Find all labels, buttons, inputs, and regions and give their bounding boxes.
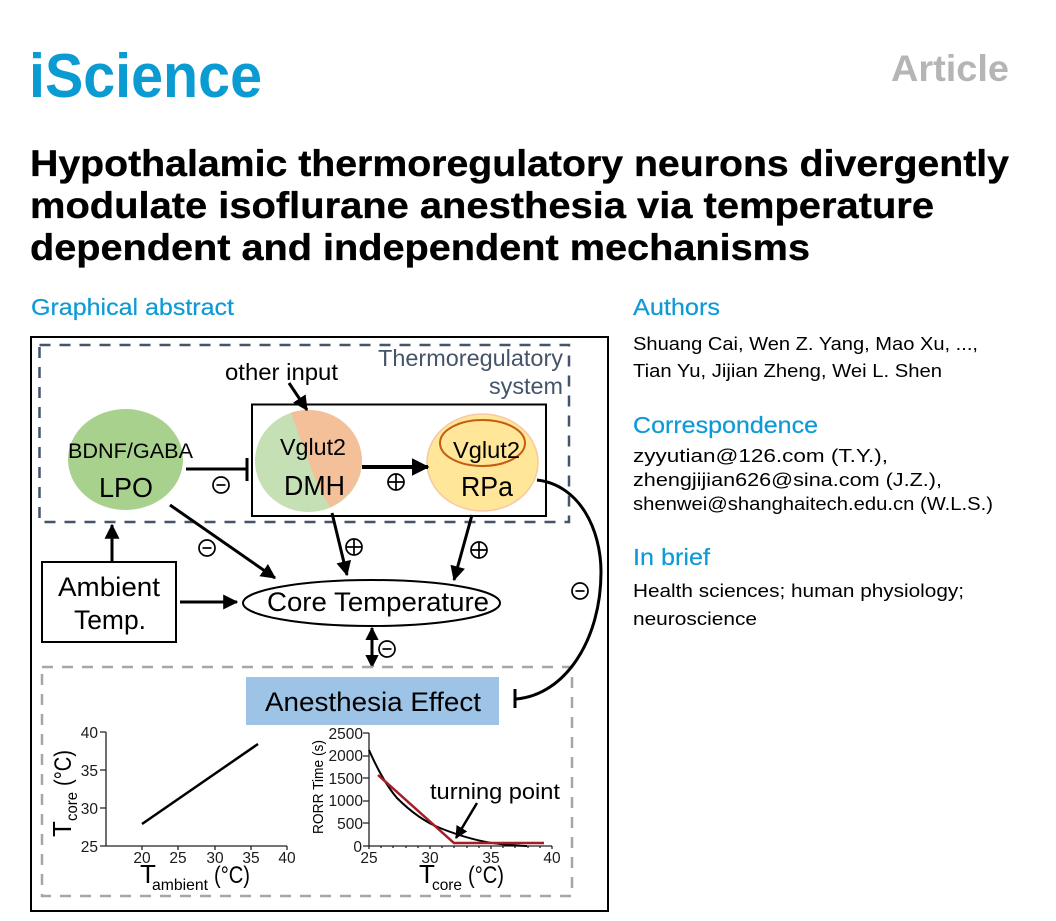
title: dependent and independent mechanisms <box>30 226 810 268</box>
chart: Tcore vs Tambient: ambient <box>152 877 209 894</box>
chart: Tcore vs Tambient: (°C) <box>214 862 250 889</box>
box: Ambient Temp.: Temp. <box>74 605 146 635</box>
box: Anesthesia Effect: Anesthesia Effect <box>265 687 482 717</box>
chart: RORR time vs Tcore: 2500 <box>329 726 363 743</box>
panel: anesthesia dashed box <box>42 667 572 896</box>
text: author list: Shuang Cai, Wen Z. Yang, Mao Xu, ..., <box>633 333 978 354</box>
sign: minus core-anesthesia <box>379 641 395 657</box>
text: correspondence emails: zhengjijian626@sina.com (J.Z.), <box>633 469 942 490</box>
title: modulate isoflurane anesthesia via temperature <box>30 184 934 226</box>
arrow: DMH to core temperature <box>332 513 347 575</box>
chart: Tcore vs Tambient: 25 <box>81 839 98 856</box>
chart: Tcore vs Tambient: 40 <box>278 850 296 867</box>
chart: Tcore vs Tambient: 35 <box>242 850 260 867</box>
text: in brief keywords: Health sciences; human physiology; <box>633 580 964 601</box>
arrow: core temperature to anesthesia, two-way <box>370 628 374 667</box>
inhibition arrow: RPa to anesthesia effect <box>515 480 601 708</box>
arrow: ambient to core temperature <box>180 600 237 604</box>
text: correspondence emails: shenwei@shanghaitech.edu.cn (W.L.S.) <box>633 493 993 514</box>
arrow: DMH to RPa <box>362 465 428 469</box>
text: author list: Tian Yu, Jijian Zheng, Wei L. Shen <box>633 360 942 381</box>
heading: Graphical abstract: Graphical abstract <box>31 294 234 320</box>
label: other input: other input <box>225 359 338 385</box>
sign: plus DMH-RPa <box>388 474 404 490</box>
box: Anesthesia Effect <box>246 677 499 725</box>
node: DMH <box>255 410 362 512</box>
text: correspondence emails: zyyutian@126.com (T.Y.), <box>633 445 888 466</box>
heading: In brief: In brief <box>633 544 711 570</box>
node: RPa: Vglut2 <box>453 437 520 463</box>
node: LPO: LPO <box>99 472 153 503</box>
chart: RORR time vs Tcore <box>311 726 561 894</box>
chart: RORR time vs Tcore: T <box>419 859 435 889</box>
chart: RORR time vs Tcore: turning point <box>430 779 561 804</box>
heading: Correspondence: Correspondence <box>633 412 818 438</box>
arrow: other input to DMH <box>289 383 307 410</box>
chart: Tcore vs Tambient: 30 <box>81 801 98 818</box>
chart: Tcore vs Tambient: 20 <box>133 850 151 867</box>
box: DMH and RPa group <box>252 404 546 516</box>
chart: RORR time vs Tcore: 40 <box>543 850 561 867</box>
chart: RORR time vs Tcore: core <box>432 877 462 894</box>
heading: Authors: Authors <box>633 294 720 320</box>
label: Thermoregulatory system: system <box>489 373 563 399</box>
chart: RORR time vs Tcore: 35 <box>482 850 500 867</box>
sign: minus LPO-DMH <box>213 477 229 493</box>
chart: Tcore vs Tambient: 35 <box>81 763 98 780</box>
arrow: LPO to core temperature <box>170 505 275 578</box>
title <box>30 142 1009 268</box>
arrow: RPa to core temperature <box>454 515 472 580</box>
panel: graphical abstract <box>31 337 608 911</box>
arrow: ambient to LPO <box>110 525 114 562</box>
chart: Tcore vs Tambient: T <box>140 859 156 889</box>
chart: RORR time vs Tcore: 500 <box>337 816 363 833</box>
node: RPa: RPa <box>461 471 514 502</box>
text: author list <box>633 333 978 381</box>
node: DMH: DMH <box>284 470 345 501</box>
label: Thermoregulatory system <box>378 345 563 399</box>
chart: Tcore vs Tambient: 30 <box>206 850 224 867</box>
node: LPO <box>68 409 194 510</box>
logo: iScience: iScience <box>29 42 262 111</box>
sign: minus RPa-anesthesia <box>572 583 588 599</box>
box: Ambient Temp.: Ambient <box>58 572 160 602</box>
node: Core Temperature: Core Temperature <box>267 587 489 617</box>
label: Thermoregulatory system: Thermoregulatory <box>378 345 563 371</box>
inhibition arrow: LPO to DMH <box>186 458 247 481</box>
chart: Tcore vs Tambient <box>47 725 296 894</box>
chart: Tcore vs Tambient: 25 <box>169 850 187 867</box>
chart: RORR time vs Tcore: 25 <box>360 850 378 867</box>
chart: RORR time vs Tcore: 30 <box>421 850 439 867</box>
box: Ambient Temp. <box>42 562 176 642</box>
text: in brief keywords: neuroscience <box>633 608 757 629</box>
label: Article: Article <box>891 48 1009 89</box>
chart: Tcore vs Tambient: (°C) <box>50 750 77 786</box>
chart: Tcore vs Tambient: T <box>47 821 77 837</box>
chart: RORR time vs Tcore: RORR Time (s) <box>311 740 327 834</box>
chart: RORR time vs Tcore: 1500 <box>329 771 363 788</box>
title: Hypothalamic thermoregulatory neurons divergently <box>30 142 1009 184</box>
chart: RORR time vs Tcore: (°C) <box>468 862 504 889</box>
sign: plus RPa-core <box>471 542 487 558</box>
node: LPO: BDNF/GABA <box>68 439 194 463</box>
sign: minus LPO-core <box>199 540 215 556</box>
sign: plus DMH-core <box>346 539 362 555</box>
chart: Tcore vs Tambient: core <box>64 792 81 821</box>
node: Core Temperature <box>243 580 500 626</box>
chart: RORR time vs Tcore: 0 <box>353 839 362 856</box>
text: in brief keywords <box>633 580 964 629</box>
text: correspondence emails <box>633 445 993 514</box>
panel: thermoregulatory system dashed box <box>40 345 569 522</box>
chart: Tcore vs Tambient: 40 <box>81 725 98 742</box>
chart: RORR time vs Tcore: 1000 <box>329 793 363 810</box>
chart: RORR time vs Tcore: 2000 <box>329 748 363 765</box>
node: DMH: Vglut2 <box>280 434 346 460</box>
node: RPa <box>427 414 538 511</box>
